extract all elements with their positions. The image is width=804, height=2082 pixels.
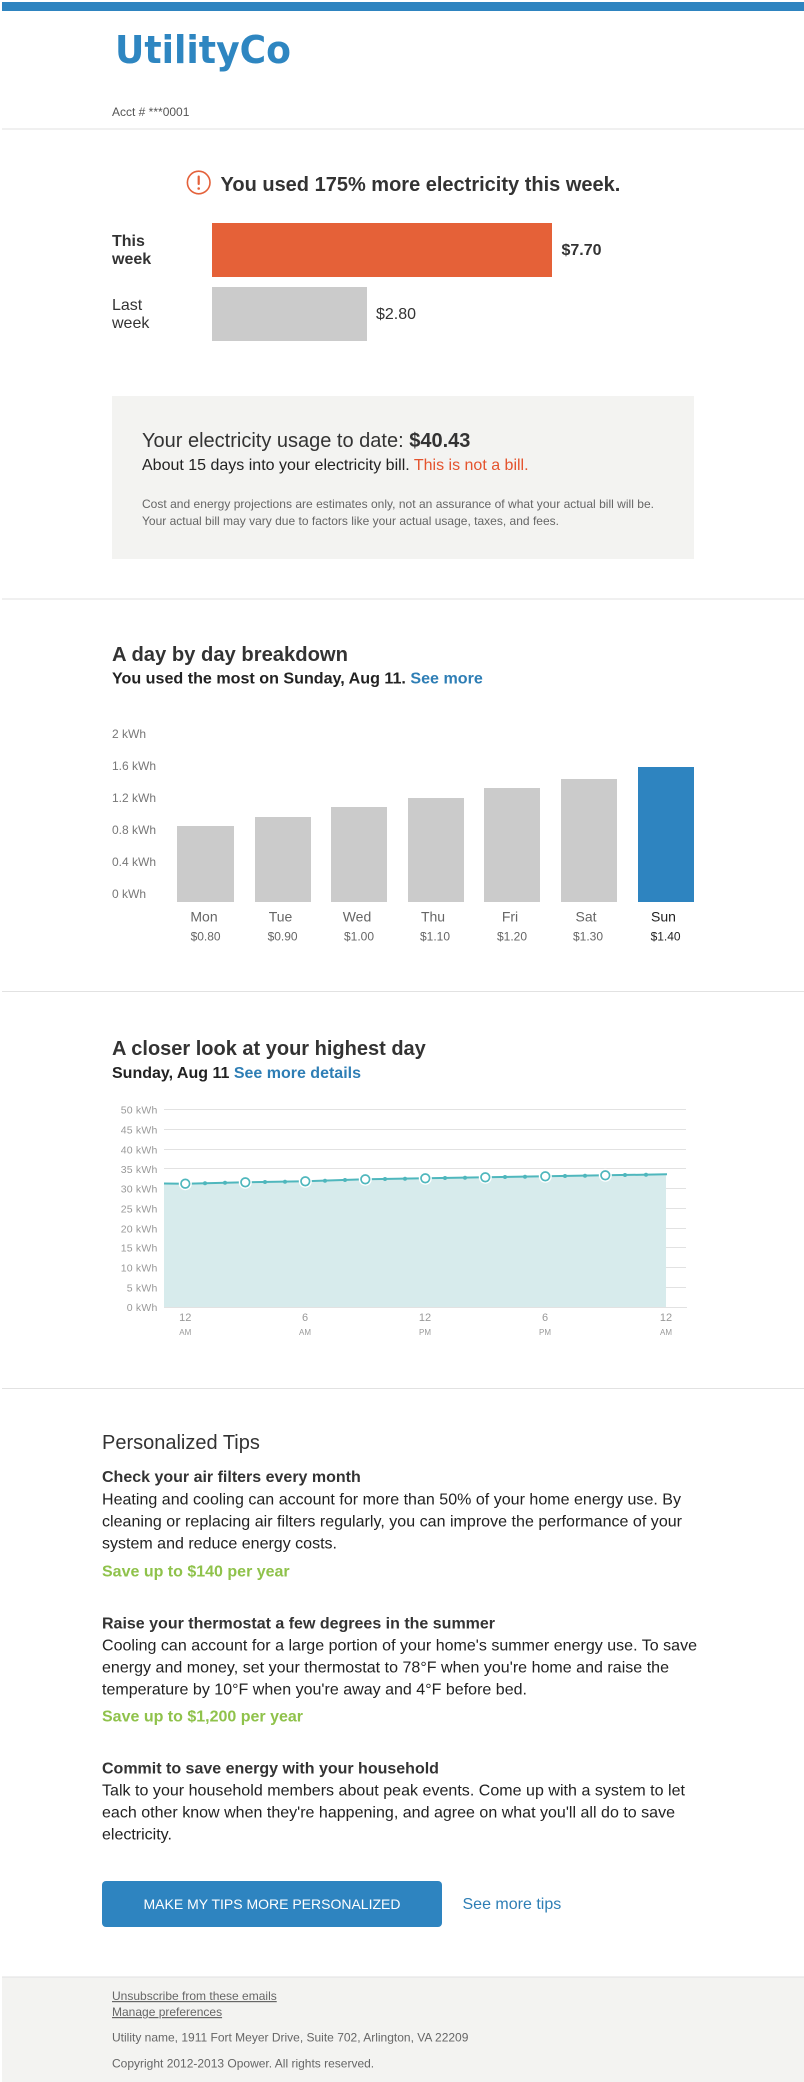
bar chart: Sat [575,908,597,924]
panel: personalized tips [102,1432,697,1927]
this week value: $7.70 [562,242,602,259]
tip: household [102,1761,686,1844]
panel: day by day [112,644,694,944]
bar chart [112,727,694,944]
panel: usage to date [112,396,694,559]
header [112,28,291,119]
line chart: 0 kWh [127,1302,158,1314]
tips heading: Personalized Tips [102,1432,260,1454]
line chart: PM [419,1328,431,1337]
line chart: 20 kWh [121,1224,158,1236]
bar chart: 2 kWh [112,727,146,741]
tip: air filters: system and reduce energy costs. [102,1536,337,1553]
logo: UtilityCo [115,28,291,72]
copyright: Copyright 2012-2013 Opower. All rights reserved. [112,2057,374,2071]
line chart: 45 kWh [121,1124,158,1136]
subheading: Sunday, Aug 11 See more details [112,1065,361,1082]
tip: household: Commit to save energy with your household [102,1761,439,1778]
line chart: PM [539,1328,551,1337]
bar chart: 1.2 kWh [112,791,156,805]
line chart: 25 kWh [121,1204,158,1216]
account number: Acct # ***0001 [112,105,190,119]
disclaimer [142,497,654,528]
bar chart: $0.90 [268,930,298,944]
bar chart: Sun [651,908,676,924]
bar chart: Fri [502,908,518,924]
tip: thermostat: temperature by 10°F when you're away and 4°F before bed. [102,1682,527,1699]
heading: A day by day breakdown [112,644,348,666]
footer [2,1976,804,2082]
icon: alert [187,171,210,194]
this week label: week [111,251,151,268]
line chart: 10 kWh [121,1262,158,1274]
tip: thermostat [102,1616,697,1726]
bar chart: Wed [343,908,371,924]
bar chart: $1.10 [420,930,450,944]
address: Utility name, 1911 Fort Meyer Drive, Suite 702, Arlington, VA 22209 [112,2031,469,2045]
usage subline: About 15 days into your electricity bill. This is not a bill. [142,457,529,474]
bar chart: 0.8 kWh [112,823,156,837]
preferences link: Manage preferences [112,2005,222,2019]
panel: highest day [112,1038,687,1337]
tip: household: each other know when they're happening, and agree on what you'll all do to save [102,1805,675,1822]
tip: air filters [102,1469,683,1581]
line chart: AM [179,1328,192,1337]
bar chart: 0 kWh [112,887,146,901]
tip: air filters: Save up to $140 per year [102,1564,290,1581]
tip: thermostat: Cooling can account for a large portion of your home's summer energy use. To save [102,1638,697,1655]
bar chart: $1.40 [651,930,681,944]
tip: thermostat: energy and money, set your thermostat to 78°F when you're home and raise the [102,1660,669,1677]
bar chart: 0.4 kWh [112,855,156,869]
line chart: 30 kWh [121,1184,158,1196]
last week value: $2.80 [376,306,416,323]
bar chart: $0.80 [191,930,221,944]
bar chart: $1.30 [573,930,603,944]
line chart: 12 [660,1312,672,1324]
this week label: This [112,233,145,250]
tip: air filters: Heating and cooling can account for more than 50% of your home energy use. By [102,1492,681,1509]
tip: air filters: Check your air filters every month [102,1469,361,1486]
panel: weekly comparison [111,171,620,341]
bar chart: $1.20 [497,930,527,944]
disclaimer: Cost and energy projections are estimates only, not an assurance of what your actual bill will be. [142,497,654,511]
line chart [121,1104,687,1337]
tip: household: Talk to your household members about peak events. Come up with a system to let [102,1783,686,1800]
disclaimer: Your actual bill may vary due to factors like your actual usage, taxes, and fees. [142,514,559,528]
line chart: 12 [179,1312,191,1324]
line chart: 35 kWh [121,1164,158,1176]
bar chart: Tue [269,908,293,924]
line chart: 12 [419,1312,431,1324]
tip: household: electricity. [102,1827,172,1844]
line chart: 6 [542,1312,548,1324]
subheading: You used the most on Sunday, Aug 11. See more [112,670,483,688]
unsubscribe link: Unsubscribe from these emails [112,1989,277,2003]
usage headline: Your electricity usage to date: $40.43 [142,430,470,452]
headline: You used 175% more electricity this week. [220,174,620,196]
line chart: 40 kWh [121,1144,158,1156]
last week label: week [111,315,150,332]
line chart: 6 [302,1312,308,1324]
button [102,1881,442,1927]
button: MAKE MY TIPS MORE PERSONALIZED [144,1896,400,1912]
bar chart: 1.6 kWh [112,759,156,773]
last week bar [212,287,367,341]
line chart: AM [299,1328,311,1337]
line chart: 5 kWh [127,1282,158,1294]
line chart: AM [660,1328,672,1337]
tip: thermostat: Raise your thermostat a few degrees in the summer [102,1616,495,1633]
tip: thermostat: Save up to $1,200 per year [102,1709,303,1726]
bar chart: Thu [421,908,445,924]
last week label: Last [112,297,142,314]
tip: air filters: cleaning or replacing air filters regularly, you can improve the performance of your [102,1514,683,1531]
heading: A closer look at your highest day [112,1038,427,1060]
line chart: 50 kWh [121,1104,158,1116]
top accent bar [2,2,804,11]
bar chart: $1.00 [344,930,374,944]
see more tips link: See more tips [462,1896,561,1913]
line chart: 15 kWh [121,1242,158,1254]
bar chart: Mon [190,908,218,924]
this week bar [212,223,552,277]
